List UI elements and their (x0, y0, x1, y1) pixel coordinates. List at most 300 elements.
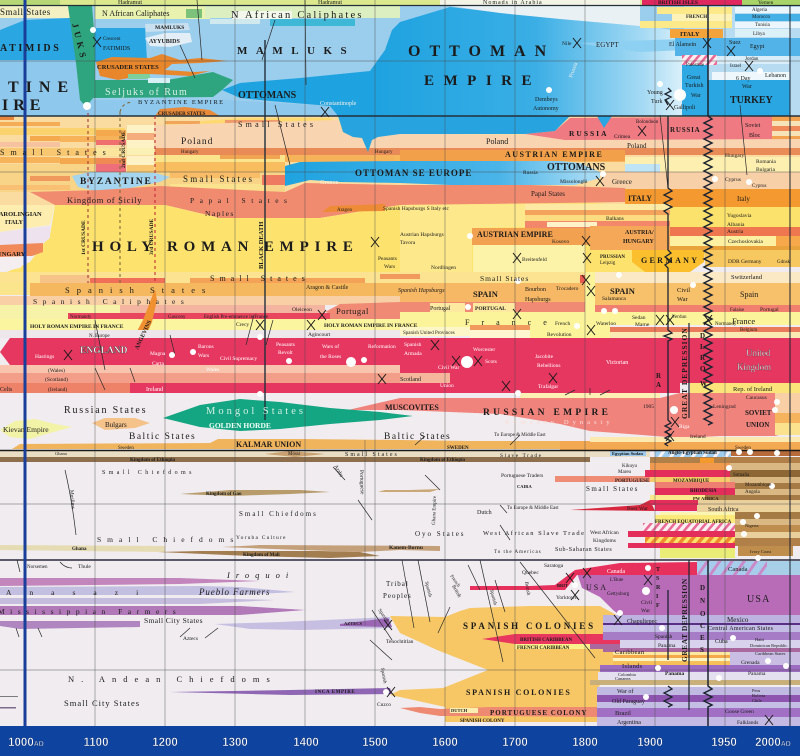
text block: Middle East labels: Hadramut (118, 0, 142, 6)
text block: Russia and Baltic labels: Leningrad (713, 404, 736, 410)
pods: Bulgars (92, 418, 150, 430)
text block: British Isles labels: Union (440, 383, 454, 389)
text block: Central and Western Europe labels: Spanish Hapsburgs (398, 288, 445, 294)
heading: Ottomans: OTTOMANS (547, 162, 606, 173)
text block: war and depression vertical labels: R (656, 585, 661, 591)
text block: Americas labels: Spanish (379, 667, 387, 684)
text block: Middle East labels: Young (647, 90, 663, 96)
blue wedge: Ottoman main above Poland (338, 116, 570, 152)
text block: Middle East labels: AYYUBIDS (149, 39, 180, 45)
text block: Africa labels: West African (590, 529, 619, 536)
text block: British Isles labels: Carta (152, 361, 164, 367)
text block: Central and Western Europe labels: HOLY ROMAN EMPIRE IN FRANCE (30, 324, 124, 330)
text block: Africa labels: Angola (745, 490, 760, 495)
text block: Eastern Europe labels: Small States (238, 120, 316, 129)
heading: Mamluks: MAMLUKS (237, 45, 355, 57)
text block: Eastern Europe labels: Spanish Hapsburgs S Italy etc (383, 206, 449, 212)
heading: Mongol States: Mongol States (206, 406, 306, 417)
text block: Americas labels: Bolivia (752, 693, 765, 698)
field: Crusader States (96, 54, 228, 116)
text block: Americas labels: N. Andean Chiefdoms (68, 674, 277, 684)
lines: Early South American thin bands (0, 696, 18, 708)
axis label: 1950: 1950 (711, 737, 737, 749)
text block: Eastern Europe labels: Romania (756, 159, 776, 165)
text block: Africa labels: Kikuyu (622, 464, 638, 469)
text block: Central and Western Europe labels: France (732, 316, 755, 326)
text block: Central and Western Europe labels: Portugal (760, 307, 779, 313)
dashed lines: Crusades (88, 102, 155, 283)
text block: Africa labels: Kingdom of Gao (206, 492, 242, 497)
text block: Eastern Europe labels: Papal States (531, 190, 565, 198)
text block: Eastern Europe labels: Soviet (745, 123, 761, 129)
text block: Americas labels: Anasazi (6, 588, 156, 597)
text block: Eastern Europe labels: Cyprus (752, 184, 766, 189)
text block: Eastern Europe labels: RUSSIA (670, 126, 700, 134)
band: Austrian Empire (400, 150, 625, 161)
stripes: Colonial Africa (610, 450, 800, 558)
text block: Central and Western Europe labels: Bourbon (525, 287, 546, 293)
text block: Middle East labels: BRITISH ISLES (658, 0, 698, 6)
text block: British Isles labels: Armada (404, 351, 422, 357)
band: Mississippian Farmers (0, 606, 305, 615)
panel: British Isles (0, 338, 800, 393)
text block: Central and Western Europe labels: Wars (384, 264, 395, 270)
band: Kalmar Union (12, 439, 590, 449)
text block: Central and Western Europe labels: Aragon & Castile (306, 285, 349, 291)
block: Soviet Bloc stripes (772, 116, 800, 139)
notch: blue in Russia (597, 116, 612, 128)
text block: Americas labels: Dominican Republic (750, 643, 787, 648)
text block: Eastern Europe labels: Bolondoon (636, 120, 659, 125)
text block: Africa labels: Nigeria (745, 523, 758, 528)
band: England (0, 338, 680, 393)
text block: Americas labels: Panama (748, 671, 766, 677)
text block: Middle East labels: ITALY (680, 31, 700, 38)
text block: Central and Western Europe labels: Waterloo (596, 321, 616, 327)
text block: Angevins: ANGEVINS (134, 319, 153, 351)
text block: Eastern Europe labels: Small States (183, 174, 254, 184)
text block: British Isles labels: (Wales) (48, 367, 65, 374)
heading: Byzantine Empire: TINE (8, 79, 75, 96)
text block: war and depression vertical labels: L (700, 343, 705, 351)
text block: Americas labels: Aztecs (183, 636, 198, 642)
text block: Americas labels: Argentina (617, 720, 641, 726)
text block: Russia and Baltic labels: MUSCOVITES (385, 403, 439, 412)
field: Holy Roman Empire (0, 203, 670, 275)
text block: Central and Western Europe labels: Salamanca (602, 296, 626, 302)
text block: British Isles labels: the Roses (320, 354, 341, 360)
text block: Americas labels: Brazil (615, 710, 631, 717)
text block: Central and Western Europe labels: Hapsburgs (525, 297, 551, 303)
text block: Americas labels: Cuzco (377, 702, 391, 708)
text block: British Isles labels: (Ireland) (48, 386, 67, 393)
strip: Portuguese traders (555, 476, 655, 482)
text block: Middle East labels: FRENCH (686, 15, 707, 20)
heading: Spain: SPAIN (473, 289, 499, 299)
text block: British Isles labels: Kingdom (737, 362, 771, 372)
panel: Middle East and North Africa field (0, 0, 800, 129)
text block: Middle East labels: Lebanon (765, 73, 786, 79)
text block: Africa labels: To the Americas (494, 550, 542, 555)
text block: Americas labels: War (641, 608, 650, 614)
text block: Central and Western Europe labels: Kosovo (552, 239, 569, 245)
band: Kingdom of Gao (180, 490, 330, 496)
text block: war and depression vertical labels: GREAT DEPRESSION (680, 327, 689, 419)
text block: Americas labels: SPANISH COLONY (460, 719, 505, 724)
field: Russian Empire (348, 393, 800, 438)
text block: Central and Western Europe labels: 3rd CRUSADE (149, 218, 155, 255)
band: Rep of Ireland (690, 383, 800, 393)
text block: Central and Western Europe labels: Breitenfeld (522, 256, 547, 263)
text block: Middle East labels: War (691, 93, 701, 99)
text block: Americas labels: Haiti (755, 637, 765, 642)
text block: British Isles labels: Rebellions (537, 363, 561, 369)
text block: Eastern Europe labels: Poland (627, 142, 647, 150)
band: Kingdom of Ghana (0, 545, 165, 552)
text block: Americas labels: Iroquoi (226, 570, 294, 580)
text block: Central and Western Europe labels: Small States (480, 274, 529, 283)
field: Byzantine Empire light blue (0, 60, 340, 129)
text block: British Isles labels: Ireland (146, 387, 163, 393)
text block: Africa labels: Ivory Coast (750, 549, 772, 554)
text block: Middle East labels: Algeria (752, 8, 768, 13)
text block: Americas labels: Peoples (383, 592, 412, 600)
text block: war and depression vertical labels: W (700, 380, 707, 388)
text block: Africa labels: Portuguese Traders (501, 473, 543, 479)
text block: Central and Western Europe labels: AUSTRIA/ (625, 230, 654, 236)
stripes: Balkans (525, 204, 670, 228)
icons: white revolution bursts (83, 27, 789, 700)
pod: Songhay (378, 489, 440, 492)
text block: war and depression vertical labels: R (656, 372, 662, 380)
text block: Americas labels: Old Paraguay (612, 699, 645, 705)
text block: British Isles labels: Scotland (400, 377, 421, 383)
band: Upper Mississippi (0, 598, 275, 604)
text block: Americas labels: Caribbean States (755, 651, 786, 656)
text block: British Isles labels: Civil War (438, 365, 459, 371)
line: Black Death (264, 40, 266, 420)
strip: French Caribbean (515, 644, 655, 649)
text block: Middle East labels: Prussia (568, 61, 580, 79)
stripes: Small States west (0, 116, 154, 172)
text block: British Isles labels: Victorian (606, 360, 628, 366)
strip: pale yellow above Russia (520, 393, 660, 399)
text block: Americas labels: Spanish (376, 608, 390, 625)
text block: Americas labels: Thule (78, 564, 91, 570)
text block: Middle East labels: Egypt (750, 44, 765, 50)
strip: Lebanon and Israel (712, 56, 790, 80)
text block: Americas labels (0, 563, 787, 726)
text block: Eastern Europe labels: Bloc (749, 133, 761, 139)
text block: Americas labels: Goose Green (725, 709, 754, 715)
band: Anasazi (0, 586, 295, 595)
heading: Ottoman Empire: OTTOMAN (408, 43, 555, 60)
axis label: 1300: 1300 (222, 737, 248, 749)
text block: Africa labels: Dutch (477, 510, 492, 516)
text block: Eastern Europe labels: Hungary (181, 150, 199, 155)
text block: Americas labels: Spanish (488, 589, 497, 606)
text block: Americas labels: AZTECS (344, 621, 363, 626)
text block: Americas labels: INCA EMPIRE (315, 690, 355, 695)
text block: Central and Western Europe labels: Switzerland (731, 274, 763, 281)
axis label: 1500: 1500 (362, 737, 388, 749)
text block: Eastern Europe labels: Missolonghi (560, 179, 588, 185)
text block: Eastern Europe labels: Russia (523, 170, 538, 176)
panel: Americas field (0, 561, 800, 726)
text block: Central and Western Europe labels: Spanish United Provinces (403, 331, 455, 336)
text block: British Isles labels: Spanish (404, 342, 422, 348)
text block: Middle East labels: Dembeys (535, 97, 558, 103)
band: Spanish Caliphates (0, 296, 400, 305)
text block: Middle East labels: Morocco (752, 15, 771, 20)
text block: war and depression vertical labels: C (700, 622, 705, 630)
text block: Middle East labels: MAMLUKS (155, 25, 184, 31)
text block: Africa labels: Yoruba Culture (236, 535, 287, 541)
text block: Africa labels: Kingdom of Mali (243, 553, 280, 558)
text block: war and depression vertical labels: S (700, 646, 704, 654)
band: Iroquoi (0, 578, 260, 586)
text block: Americas labels: Falklands (737, 720, 758, 726)
stripes: Latin American states (590, 615, 800, 726)
axis label: 2000 AD: 2000AD (755, 737, 791, 749)
text block: British Isles labels: Civil Supremacy (220, 356, 257, 362)
axis label: 1000 AD: 1000AD (8, 737, 44, 749)
text block: Central and Western Europe labels: DDR Germany (728, 259, 762, 265)
band: Austrian Empire lower (472, 228, 590, 245)
panel: Eastern Europe bands (0, 116, 800, 218)
text block: Africa labels: Sub-Saharan States (555, 547, 612, 553)
text block: British Isles labels: Trafalgar (538, 383, 558, 390)
text block: Americas labels: Spanish (423, 581, 432, 598)
text block: Central and Western Europe labels: Portugal (430, 306, 451, 312)
text block: Middle East labels: Autonomy (533, 106, 559, 112)
text block: Central and Western Europe labels: Belgium (740, 328, 757, 333)
text block: Africa labels: Boer War (627, 506, 648, 512)
text block: Central and Western Europe labels: 2nd CRUSADE (121, 131, 127, 168)
lozenge: Mamluks small (145, 23, 190, 32)
boxes: Portugal labels (430, 303, 515, 312)
field: Ottoman Southeast Europe (285, 161, 600, 186)
text block: Middle East labels: Hadramut (318, 0, 342, 6)
field: Seljuks of Rum (68, 6, 233, 107)
text block: Middle East labels: Palestine (686, 63, 705, 68)
heading: N African Caliphates: N African Caliphates (231, 10, 364, 21)
band: Greece (602, 172, 800, 189)
text block: Russia and Baltic labels (3, 395, 772, 451)
text block: Americas labels: Tribal (386, 580, 409, 588)
text block: war and depression vertical labels: T (656, 567, 660, 573)
text block: Central and Western Europe labels: Austria (727, 229, 744, 235)
field: Soviet right blocks (775, 393, 800, 435)
text block: Central and Western Europe labels: Revolution (547, 332, 572, 338)
block: Yugoslavia, Albania, Czechoslovakia (670, 207, 800, 250)
text block: Middle East labels: Crescent (103, 37, 121, 42)
text block: British Isles labels: Celts (0, 387, 13, 393)
band: orange lower (560, 437, 800, 450)
text block: war and depression vertical labels: GREAT DEPRESSION (680, 578, 689, 662)
text block: Americas labels: L'Bute (610, 578, 624, 583)
text block: Central and Western Europe labels: Sedan (632, 315, 646, 321)
strips: French, Italy and right-hand colonies (640, 5, 800, 116)
text block: Africa labels: Mareu (618, 470, 632, 475)
band: Pale northern French (0, 305, 800, 319)
band: Hungary (155, 148, 800, 155)
text block: Africa labels: Kingdoms (593, 538, 616, 544)
text block: Central and Western Europe labels: France (465, 318, 559, 327)
text block: Russia and Baltic labels: SOVIET (745, 409, 772, 417)
text block: Central and Western Europe labels: Spanish Caliphates (33, 297, 189, 306)
text block: Russia and Baltic labels: Sweden (735, 446, 751, 451)
hatch: Canada (697, 561, 800, 575)
text block: British Isles labels: Wars (198, 353, 209, 359)
heading: Ottoman Empire: EMPIRE (424, 73, 541, 89)
text block: Middle East labels (0, 0, 786, 117)
text block: Central and Western Europe labels: Spanish States (65, 285, 212, 295)
pods: Kievan Empire (0, 419, 72, 439)
text block: Central and Western Europe labels: Gascony (168, 315, 186, 320)
text block: Middle East labels: N African Caliphates (102, 9, 170, 18)
text block: war and depression vertical labels (656, 327, 707, 662)
text block: Africa labels: PW AFRICA (693, 496, 719, 501)
text block: Eastern Europe labels: ITALY (5, 220, 24, 226)
text block: Middle East labels: Turk (651, 99, 662, 105)
field: Fatimids (0, 18, 147, 62)
text block: Russia and Baltic labels: Bulgars (105, 421, 127, 429)
text block: British Isles labels: Worcester (473, 347, 495, 353)
band: Spanish States (0, 283, 800, 305)
text block: Americas labels: Gettysburg (607, 592, 630, 597)
text block: British Isles labels: Scots (485, 359, 497, 365)
text block: Eastern Europe labels: Hungary (725, 153, 744, 159)
text block: British Isles labels: Rep. of Ireland (733, 386, 773, 393)
band: Kingdom of Ethiopia (0, 457, 590, 462)
text block: British Isles labels: Wales (206, 367, 219, 373)
field: Spanish Colonies (390, 606, 620, 722)
text block: Russia and Baltic labels: Riga (679, 424, 690, 430)
band: Inca Empire (170, 688, 392, 695)
text block: Middle East labels: Suez (729, 40, 741, 46)
text block: Africa labels: South Africa (708, 506, 739, 513)
band: Portugal (325, 302, 585, 318)
band: Aragon (322, 204, 385, 212)
text block: Central and Western Europe labels: Albania (727, 222, 745, 228)
text block: Eastern Europe labels (0, 120, 776, 258)
text block: Americas labels: Islands (622, 663, 643, 670)
text block: Central and Western Europe labels: Normandy (715, 322, 737, 327)
text block: Middle East labels: El Alamein (669, 42, 696, 48)
field: Russian States (0, 393, 800, 450)
text block: Africa labels: Kingdom of Ethiopia (420, 458, 466, 463)
text block: Eastern Europe labels: Naples (205, 209, 235, 218)
heading: Spanish Colonies upper: SPANISH COLONIES (463, 621, 596, 631)
heading: Ottoman Empire (408, 43, 555, 89)
line: Second World War (704, 5, 712, 726)
text block: British Isles labels: (Scotland) (45, 376, 68, 383)
text block: Russia and Baltic labels: UNION (746, 421, 769, 429)
panel: Central Europe field (0, 203, 800, 354)
text block: British Isles labels: Hastings (35, 354, 54, 360)
band: Portuguese Colony (400, 707, 600, 717)
strip: pale line under France (0, 330, 400, 338)
text block: Americas labels: Chile (752, 698, 762, 703)
pod: Mossi (265, 451, 325, 457)
text block: Middle East labels: Yemen (758, 0, 774, 6)
text block: Middle East labels: War (742, 84, 752, 90)
band: Wales (0, 365, 400, 373)
text block: Eastern Europe labels: ITALY (628, 194, 652, 203)
axis label: 1900: 1900 (637, 737, 663, 749)
text block: Central and Western Europe labels: Normandy (70, 315, 92, 320)
band: Austria Hungary (590, 226, 670, 250)
text block: Africa labels: Portuguese (358, 470, 365, 495)
text block: Americas labels: Chapultepec (627, 619, 657, 625)
text block: British Isles labels: Magna (150, 351, 166, 357)
field: USA (577, 573, 800, 617)
text block: Middle East labels: Israel (730, 64, 742, 69)
axis label: 1100: 1100 (84, 737, 108, 749)
text block: war and depression vertical labels: I (656, 594, 659, 600)
field: Turkey (682, 65, 790, 116)
text block: Eastern Europe labels: Hungary (375, 150, 393, 155)
text block: Africa labels: Small Chiefdoms (97, 535, 239, 544)
text block: Africa labels: Ghana (55, 451, 67, 456)
text block: Americas labels: British (523, 581, 530, 596)
text block: Central and Western Europe labels: 1st CRUSADE (81, 220, 87, 255)
text block: Central and Western Europe labels: Gdnsk (777, 260, 791, 265)
text block: Middle East labels: EGYPT (596, 41, 619, 49)
text block: British Isles labels: Barons (198, 344, 214, 350)
text block: British Isles labels: Reformation (368, 343, 396, 350)
text block: Americas labels: Yorktown (556, 595, 578, 601)
text block: Americas labels: Panama (658, 643, 676, 649)
band: Russia (525, 116, 800, 140)
text block: British Isles labels: Jacobite (535, 354, 554, 360)
text block: Americas labels: Small City States (144, 616, 203, 625)
text block: Africa labels: Small Chiefdoms (239, 510, 318, 518)
text block: Russia and Baltic labels: SWEDEN (447, 446, 469, 451)
text block: Central and Western Europe labels: Falaise (730, 308, 745, 313)
text block: Americas labels: Pueblo Farmers (198, 587, 270, 597)
axis label: 1700: 1700 (502, 737, 528, 749)
axis label: 1200: 1200 (152, 737, 178, 749)
strip: British Caribbean (482, 634, 655, 644)
text block: Americas labels: Canada (728, 566, 748, 573)
text block: Africa labels: PORTUGUESE (615, 479, 650, 484)
text block: war and depression vertical labels: N (700, 597, 705, 605)
text block: war and depression vertical labels: A (656, 381, 661, 389)
text block: Middle East labels: Libya (753, 32, 765, 37)
heading: Ottomans: OTTOMANS (238, 90, 297, 101)
text block: Eastern Europe labels: Bulgaria (756, 167, 775, 173)
text block: Eastern Europe labels: Poland (486, 137, 508, 146)
text block: Africa labels (55, 451, 772, 558)
field: Egypt (580, 38, 800, 56)
text block: Middle East labels: Nomads in Arabia (483, 0, 543, 6)
band: Kingdom of Mali (158, 551, 380, 558)
text block: Americas labels: Cananea (615, 676, 630, 681)
text block: Central and Western Europe labels: Austrian Hapsburgs (400, 232, 444, 238)
text block: Russia and Baltic labels: Baltic States (129, 432, 196, 442)
band: France (0, 272, 800, 330)
lens: Mongol States Golden Horde (163, 399, 413, 431)
text block: Americas labels: FRENCH CARIBBEAN (517, 646, 570, 651)
band: Small States lower (0, 272, 590, 283)
text block: Africa labels: Kanem-Bornu (389, 545, 423, 551)
box: Dutch (450, 708, 478, 713)
text block: Americas labels: French (448, 574, 461, 589)
band: Italy (625, 189, 800, 207)
text block: Central and Western Europe labels: Trocadero (556, 286, 579, 292)
